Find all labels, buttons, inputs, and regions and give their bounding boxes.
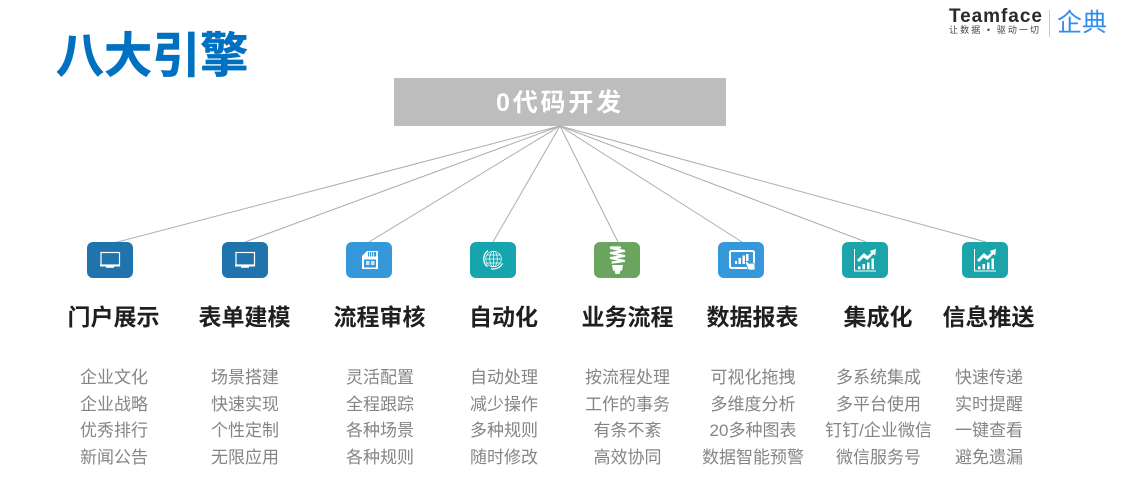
logo product name: 企典	[1057, 9, 1107, 37]
text: 集成化 list: 多系统集成	[836, 368, 921, 387]
heading: 集成化: 集成化	[844, 304, 912, 330]
logo	[949, 6, 1107, 37]
icon: touch chart tablet	[718, 242, 764, 278]
text: 集成化 list	[825, 368, 932, 467]
text: 门户展示 list	[80, 368, 148, 467]
heading: 流程审核: 流程审核	[334, 304, 426, 330]
text: 表单建模 list: 场景搭建	[211, 368, 279, 387]
text: 集成化 list: 钉钉/企业微信	[825, 421, 932, 440]
text: 表单建模 list: 快速实现	[211, 395, 279, 414]
text: 自动化 list: 多种规则	[470, 421, 538, 440]
text: 流程审核 list: 全程跟踪	[346, 395, 414, 414]
title: 八大引擎	[56, 30, 248, 83]
icon: monitor	[87, 242, 133, 278]
heading: 门户展示: 门户展示	[68, 304, 160, 330]
text: 门户展示 list: 企业文化	[80, 368, 148, 387]
text: 业务流程 list: 有条不紊	[594, 421, 662, 440]
icon: globe	[470, 242, 516, 278]
text: 门户展示 list: 企业战略	[80, 395, 148, 414]
heading: 数据报表: 数据报表	[706, 304, 798, 330]
icon: monitor	[222, 242, 268, 278]
text: 表单建模 list	[211, 368, 279, 467]
text: 信息推送 list: 实时提醒	[955, 395, 1023, 414]
text: 自动化 list	[470, 368, 538, 467]
icon: growth chart	[842, 242, 888, 278]
icon: light bulb	[594, 242, 640, 278]
text: 门户展示 list: 新闻公告	[80, 448, 148, 467]
text: 信息推送 list: 快速传递	[955, 368, 1023, 387]
heading: 业务流程: 业务流程	[582, 304, 674, 330]
text: 信息推送 list: 避免遗漏	[955, 448, 1023, 467]
heading: 信息推送: 信息推送	[942, 304, 1034, 330]
text: 集成化 list: 多平台使用	[836, 395, 921, 414]
text: 门户展示 list: 优秀排行	[80, 421, 148, 440]
text: 数据报表 list	[702, 368, 804, 467]
icon: floppy disk	[346, 242, 392, 278]
text: 业务流程 list	[585, 368, 670, 467]
text: 自动化 list: 随时修改	[470, 448, 538, 467]
text: 业务流程 list: 高效协同	[594, 448, 662, 467]
text: 表单建模 list: 无限应用	[211, 448, 279, 467]
text: 数据报表 list: 数据智能预警	[702, 448, 804, 467]
text: 数据报表 list: 20多种图表	[710, 421, 796, 440]
text: 流程审核 list: 各种场景	[346, 421, 414, 440]
heading: 表单建模: 表单建模	[198, 304, 290, 330]
text: 信息推送 list: 一键查看	[955, 421, 1023, 440]
text: 集成化 list: 微信服务号	[836, 448, 921, 467]
text: 业务流程 list: 按流程处理	[585, 368, 670, 387]
banner: 0代码开发: 0代码开发	[496, 89, 624, 117]
text: 信息推送 list	[955, 368, 1023, 467]
text: 数据报表 list: 可视化拖拽	[710, 368, 796, 387]
banner: 0代码开发	[392, 78, 726, 126]
logo tagline: 让数据 • 驱动一切	[949, 25, 1041, 35]
logo divider	[1049, 10, 1050, 37]
text: 流程审核 list	[346, 368, 414, 467]
text: 自动化 list: 自动处理	[470, 368, 538, 387]
text: 流程审核 list: 各种规则	[346, 448, 414, 467]
text: 自动化 list: 减少操作	[470, 395, 538, 414]
heading: 自动化: 自动化	[469, 304, 538, 330]
text: 业务流程 list: 工作的事务	[585, 395, 670, 414]
logo wordmark: Teamface	[949, 6, 1043, 27]
text: 流程审核 list: 灵活配置	[346, 368, 414, 387]
text: 表单建模 list: 个性定制	[211, 421, 279, 440]
text: 数据报表 list: 多维度分析	[710, 395, 796, 414]
icon: growth chart	[962, 242, 1008, 278]
